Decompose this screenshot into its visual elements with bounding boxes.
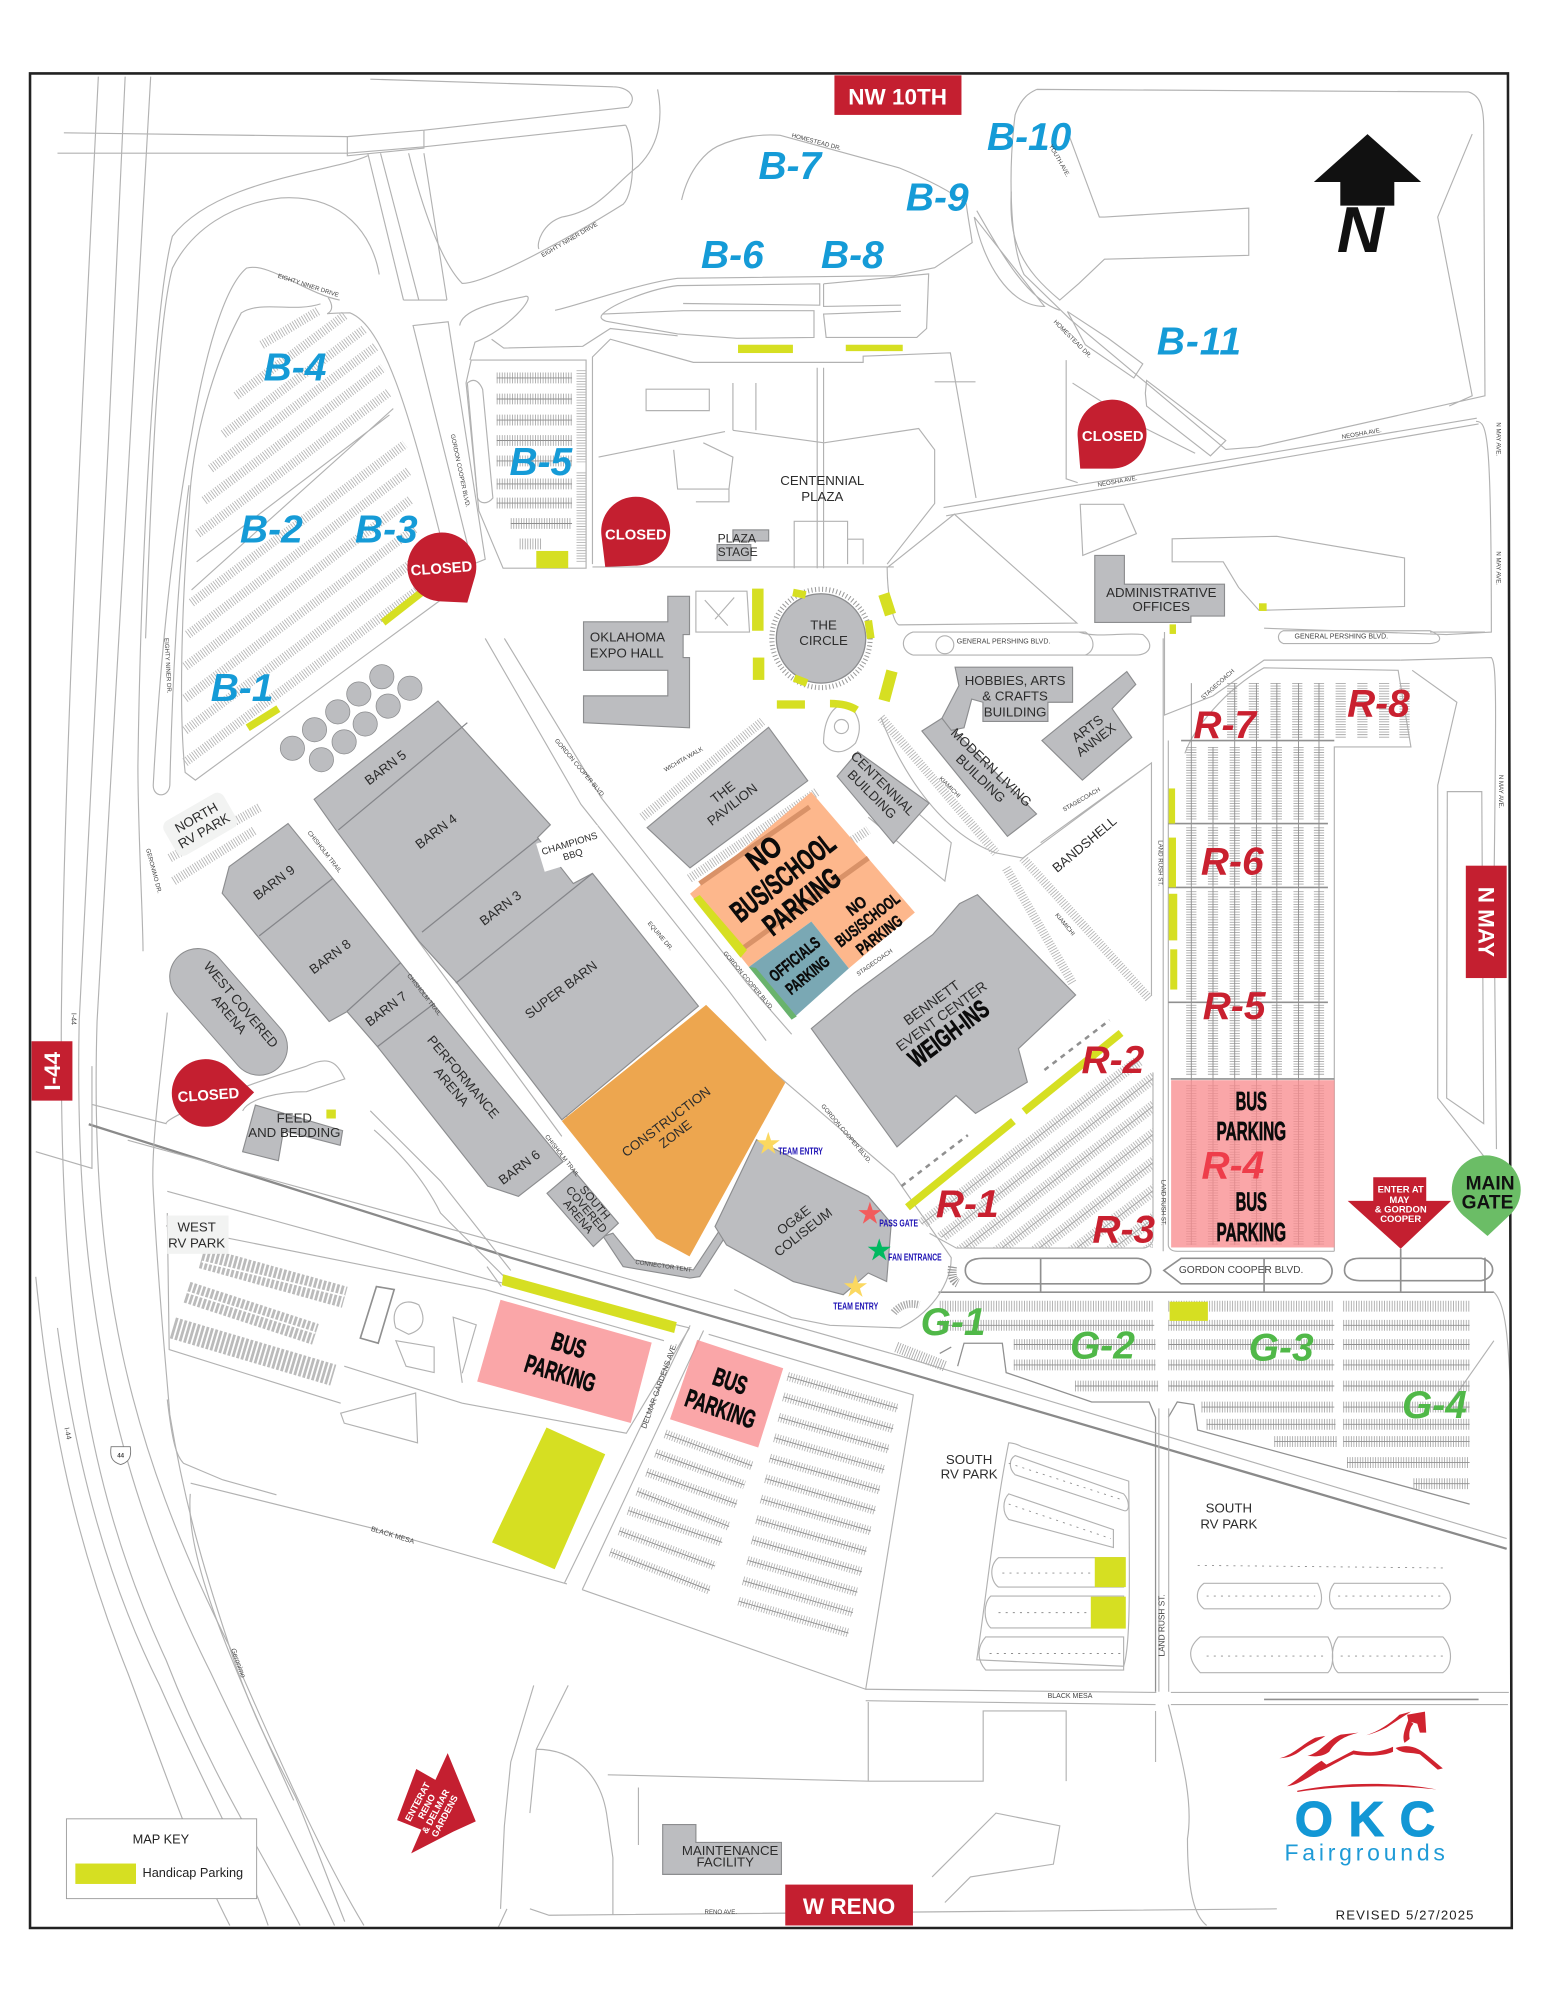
- building and area labels: OFFICES: [1133, 599, 1190, 614]
- building and area labels: & CRAFTS: [982, 688, 1048, 703]
- coliseum entrances: PASS GATE: [879, 1219, 918, 1230]
- building and area labels: PLAZA: [801, 489, 843, 504]
- small road labels: CHISHOLM TRAIL: [306, 830, 343, 875]
- no bus school parking large: NO: [740, 830, 789, 878]
- bus parking center: [681, 1357, 769, 1435]
- enter arrow reno and delmar: [397, 1753, 476, 1853]
- building and area labels: BARN 3: [477, 888, 524, 928]
- centennial building: [837, 752, 929, 843]
- closed pin west arena: CLOSED: [177, 1086, 240, 1106]
- road name: N MAY: N MAY: [1474, 887, 1499, 957]
- red lot labels: R-5: [1203, 985, 1267, 1028]
- building and area labels: ANNEX: [1073, 720, 1119, 760]
- green lot labels: G-2: [1070, 1325, 1135, 1368]
- small road labels: GORDON COOPER BLVD.: [553, 738, 606, 799]
- map key: MAP KEY: [133, 1832, 190, 1847]
- maintenance facility: [663, 1825, 781, 1874]
- south covered arena and connector tent: [547, 1171, 727, 1278]
- building and area labels: ARENA: [560, 1198, 595, 1236]
- pink bus parking areas: [477, 1080, 1335, 1448]
- building and area labels: SOUTH: [946, 1452, 992, 1467]
- building and area labels: BARN 7: [362, 989, 410, 1029]
- small road labels: LAND RUSH ST.: [1157, 840, 1164, 886]
- buildings: [198, 530, 1224, 1874]
- north arrow: [1314, 134, 1421, 266]
- small road labels: I-44: [62, 1427, 72, 1440]
- road name: W RENO: W RENO: [803, 1894, 895, 1919]
- coliseum entrances: TEAM ENTRY: [833, 1301, 878, 1312]
- enter arrow reno and delmar: & DELMAR: [420, 1787, 452, 1835]
- closed pin B-5: [601, 497, 670, 567]
- enter arrow may and gordon cooper: [1348, 1177, 1451, 1249]
- road name: N MAY: [1466, 866, 1507, 978]
- enter arrow may and gordon cooper: ENTER AT: [1378, 1185, 1424, 1196]
- star team entry north: [757, 1132, 780, 1154]
- building and area labels: THE: [810, 617, 837, 632]
- small road labels: NEOSHA AVE.: [1341, 427, 1382, 441]
- small road labels: EIGHTY NINER DRIVE: [277, 273, 340, 299]
- the circle: [772, 589, 870, 688]
- small road labels: GORDON COOPER BLVD.: [449, 434, 471, 508]
- small road labels: GORDON COOPER BLVD.: [721, 950, 775, 1012]
- officials parking: [765, 933, 837, 1001]
- red lot labels: R-7: [1193, 704, 1258, 747]
- blue lot labels: B-6: [701, 234, 764, 277]
- blue lot labels: B-5: [509, 441, 574, 484]
- building and area labels: PAVILION: [704, 780, 760, 829]
- horse: [1279, 1712, 1443, 1792]
- building and area labels: BUILDING: [953, 751, 1008, 806]
- small road labels: Geronimo: [229, 1648, 246, 1679]
- small road labels: HOMESTEAD DR.: [1052, 319, 1093, 360]
- small road labels: EIGHTY NINER DRIVE: [540, 221, 599, 259]
- blue lot labels: B-9: [906, 177, 969, 220]
- parking callouts in black condensed type: [521, 802, 1286, 1435]
- building and area labels: ADMINISTRATIVE: [1106, 585, 1217, 600]
- closed pin B-11: [1078, 400, 1147, 469]
- building and area labels: BARN 4: [412, 811, 460, 852]
- small road labels: NEOSHA AVE.: [1097, 475, 1138, 489]
- parking road medians on Gordon Cooper Blvd: [965, 1258, 1151, 1284]
- coliseum entrances: FAN ENTRANCE: [888, 1252, 942, 1263]
- OG&E coliseum: [715, 1140, 891, 1295]
- road name: W RENO: [785, 1885, 913, 1925]
- bus parking R-4: [1217, 1088, 1286, 1247]
- no bus school parking zone: [690, 792, 915, 1020]
- blue lot labels: B-4: [264, 346, 326, 389]
- enter arrow may and gordon cooper: COOPER: [1380, 1214, 1421, 1225]
- west rv park label: [167, 1216, 229, 1254]
- red lot labels: R-4: [1202, 1145, 1264, 1188]
- small road labels: EIGHTY NINER DR.: [163, 638, 172, 694]
- blue lot labels: [211, 116, 1241, 710]
- building and area labels: BUILDING: [845, 767, 899, 822]
- blue lot labels: B-1: [211, 667, 273, 710]
- building and area labels: BARN 8: [306, 936, 354, 977]
- coliseum entrances: [757, 1132, 942, 1312]
- administrative offices: [1095, 555, 1224, 622]
- no bus school parking large: BUS/SCHOOL: [724, 827, 842, 929]
- enter arrow may and gordon cooper: MAY: [1389, 1195, 1410, 1206]
- small road labels: CHISHOLM TRAIL: [405, 973, 443, 1018]
- small road labels: N MAY AVE.: [1494, 422, 1501, 456]
- building and area labels: ZONE: [656, 1117, 695, 1151]
- okc fairgrounds logo: [1279, 1712, 1445, 1865]
- champions bbq label: BBQ: [562, 847, 584, 863]
- building and area labels: SOUTH: [577, 1184, 612, 1222]
- bus parking west: [521, 1322, 608, 1398]
- red lot labels: R-2: [1081, 1039, 1145, 1082]
- okc fairgrounds logo: Fairgrounds: [1285, 1839, 1445, 1865]
- building and area labels: OG&E: [774, 1202, 814, 1238]
- building and area labels: PLAZA: [718, 532, 757, 546]
- oklahoma expo hall: [584, 596, 690, 728]
- building and area labels: HOBBIES, ARTS: [965, 673, 1066, 688]
- bus parking west: BUS: [548, 1327, 589, 1364]
- building and area labels: STAGE: [718, 545, 758, 559]
- closed pins: [172, 400, 1147, 1127]
- small road labels: STAGECOACH: [1200, 668, 1236, 701]
- green lot labels: G-3: [1249, 1326, 1314, 1369]
- small road labels: YOUTH AVE.: [1047, 143, 1071, 178]
- small road labels: DELMAR GARDENS AVE.: [639, 1342, 679, 1430]
- building and area labels: THE: [708, 778, 738, 807]
- north rv park label: NORTH: [172, 799, 220, 836]
- building and area labels: BANDSHELL: [1049, 813, 1120, 875]
- enter arrow reno and delmar: ENTERAT: [403, 1780, 432, 1823]
- no bus school parking large: [705, 802, 861, 953]
- north arrow: N: [1337, 193, 1386, 266]
- building and area labels: SUPER BARN: [522, 958, 600, 1022]
- blue lot labels: B-11: [1157, 320, 1241, 363]
- small road labels: CHISHOLM TRAIL: [543, 1134, 581, 1179]
- no bus school parking small: NO: [843, 892, 870, 920]
- tanks: [280, 665, 422, 772]
- Bennett event center: [811, 895, 1076, 1147]
- barns 9 8 7 performance arena barn 6: [222, 824, 563, 1196]
- enter arrow reno and delmar: RENO: [416, 1793, 437, 1821]
- small road labels: GORDON COOPER BLVD.: [819, 1103, 873, 1165]
- building and area labels: ARTS: [1069, 712, 1106, 745]
- closed pin B-5: CLOSED: [605, 527, 667, 543]
- west rv park bays: [173, 1258, 345, 1375]
- champions bbq label: [536, 825, 606, 872]
- building and area labels: FACILITY: [697, 1855, 754, 1870]
- officials parking: PARKING: [782, 952, 833, 999]
- small road labels: GORDON COOPER BLVD.: [1179, 1265, 1303, 1276]
- west rv park label: RV PARK: [168, 1235, 225, 1250]
- west covered arena: [198, 977, 259, 1047]
- building and area labels: CIRCLE: [799, 633, 848, 648]
- blue lot labels: B-8: [821, 234, 884, 277]
- north rv park label: RV PARK: [176, 810, 233, 852]
- highway shield 44: [111, 1447, 131, 1465]
- small road labels: N MAY AVE.: [1497, 775, 1504, 809]
- building and area labels: FEED: [277, 1110, 312, 1125]
- small road labels: RENO AVE.: [705, 1909, 737, 1916]
- main gate pin: [1452, 1155, 1521, 1236]
- building and area labels: ARENA: [209, 992, 250, 1037]
- red lot labels: R-8: [1347, 682, 1410, 725]
- building and area labels: BENNETT: [900, 977, 963, 1028]
- star team entry south: [844, 1275, 867, 1297]
- building and area labels: PERFORMANCE: [424, 1033, 502, 1121]
- small road labels: I-44: [70, 1013, 77, 1025]
- small road labels: EQUINE DR.: [646, 920, 674, 952]
- closed pin B-3: [407, 532, 476, 603]
- enter arrow may and gordon cooper: & GORDON: [1375, 1204, 1427, 1215]
- arts annex: [1042, 672, 1136, 780]
- blue lot labels: B-7: [758, 145, 824, 188]
- plaza stage: [717, 530, 769, 561]
- okc fairgrounds logo: OKC: [1295, 1793, 1435, 1847]
- green lot labels: G-1: [921, 1301, 986, 1344]
- green lot labels: G-4: [1402, 1384, 1467, 1427]
- road name: I-44: [32, 1041, 72, 1101]
- small road labels: CONNECTOR TENT: [635, 1259, 692, 1274]
- small road labels: STAGECOACH: [855, 948, 894, 978]
- no bus school parking small: BUS/SCHOOL: [831, 889, 904, 951]
- building and area labels: CENTENNIAL: [848, 748, 918, 818]
- blue lot labels: B-3: [355, 509, 418, 552]
- building and area labels: BARN 6: [496, 1147, 543, 1188]
- building and area labels: ARENA: [431, 1064, 472, 1109]
- road name: I-44: I-44: [40, 1051, 65, 1091]
- barns 5 4 3 and super barn: [314, 701, 698, 1120]
- red lot labels: [936, 682, 1410, 1251]
- bus parking R-4: BUS: [1236, 1088, 1267, 1116]
- bus parking center: PARKING: [681, 1384, 759, 1435]
- map key: [66, 1819, 257, 1899]
- blue lot labels: B-10: [987, 116, 1072, 159]
- red lot labels: R-6: [1201, 841, 1264, 884]
- building and area labels: EXPO HALL: [590, 646, 664, 661]
- small road labels: N MAY AVE.: [1494, 551, 1501, 585]
- west rv park label: WEST: [177, 1219, 216, 1234]
- coliseum entrances: TEAM ENTRY: [778, 1146, 823, 1157]
- building and area labels: BUILDING: [984, 704, 1046, 719]
- building and area labels: COVERED: [563, 1184, 609, 1236]
- main gate pin: MAIN: [1466, 1173, 1515, 1194]
- the pavilion: [647, 727, 808, 868]
- small road labels: WICHITA WALK: [663, 746, 704, 774]
- building and area labels: CONSTRUCTION: [619, 1084, 713, 1160]
- small road labels: GERONIMO DR.: [144, 848, 163, 895]
- small road labels: GENERAL PERSHING BLVD.: [957, 639, 1050, 646]
- building and area labels: [160, 473, 1257, 1870]
- building and area labels: RV PARK: [1200, 1516, 1257, 1531]
- building and area labels: EVENT CENTER: [893, 978, 990, 1054]
- building and area labels: BARN 9: [250, 862, 298, 903]
- bus parking R-4: PARKING: [1217, 1118, 1286, 1146]
- building and area labels: CENTENNIAL: [780, 473, 864, 488]
- star pass gate: [858, 1202, 881, 1224]
- construction zone: [562, 1005, 785, 1256]
- green lot labels: [921, 1301, 1467, 1427]
- red lot labels: R-1: [936, 1183, 999, 1226]
- modern living building: [922, 718, 1037, 836]
- bus parking west: PARKING: [521, 1350, 599, 1398]
- small road labels: KIAMICHI: [937, 775, 962, 800]
- small road labels: STAGECOACH: [1062, 786, 1102, 814]
- small road labels: HOMESTEAD DR.: [791, 132, 842, 152]
- officials parking: OFFICIALS: [765, 933, 824, 986]
- road name: NW 10TH: [834, 75, 961, 115]
- building and area labels: AND BEDDING: [248, 1125, 340, 1140]
- building and area labels: WEST COVERED: [201, 959, 281, 1051]
- map key: Handicap Parking: [143, 1865, 243, 1880]
- building and area labels: MODERN LIVING: [948, 725, 1035, 810]
- building and area labels: MAINTENANCE: [682, 1843, 779, 1858]
- closed pin B-3: CLOSED: [410, 559, 473, 579]
- small road labels: BLACK MESA: [1048, 1693, 1093, 1700]
- hobbies arts building: [942, 667, 1073, 730]
- building and area labels: RV PARK: [941, 1467, 998, 1482]
- north rv park label: [160, 790, 240, 859]
- star fan entrance: [868, 1238, 891, 1260]
- enter arrow reno and delmar: GARDENS: [430, 1794, 460, 1839]
- no bus school parking small: [820, 875, 915, 966]
- blue lot labels: B-2: [240, 509, 303, 552]
- no bus school parking small: PARKING: [852, 911, 906, 959]
- parking rows: [170, 310, 1470, 1633]
- bus parking R-4: BUS: [1236, 1188, 1267, 1216]
- building and area labels: OKLAHOMA: [590, 630, 665, 645]
- handicap parking markers: [248, 345, 1267, 1629]
- building and area labels: BARN 5: [362, 747, 409, 788]
- small road labels: LAND RUSH ST.: [1156, 1594, 1166, 1656]
- red lot labels: R-3: [1092, 1208, 1155, 1251]
- feed and bedding: [243, 1105, 343, 1161]
- road name: NW 10TH: NW 10TH: [848, 85, 947, 110]
- closed pin west arena: [172, 1059, 254, 1127]
- no bus school parking large: PARKING: [757, 861, 847, 942]
- small road labels: KIAMICHI: [1053, 912, 1076, 938]
- bus parking R-4: PARKING: [1217, 1219, 1286, 1247]
- bus parking center: BUS: [709, 1363, 751, 1401]
- weigh-ins: WEIGH-INS: [903, 995, 995, 1073]
- revision date: REVISED 5/27/2025: [1336, 1908, 1473, 1923]
- small road labels: LAND RUSH ST.: [1159, 1180, 1166, 1226]
- highway shield 44: 44: [117, 1452, 125, 1459]
- small road labels: GENERAL PERSHING BLVD.: [1295, 633, 1388, 640]
- closed pin B-11: CLOSED: [1082, 429, 1144, 445]
- building and area labels: COLISEUM: [771, 1205, 835, 1260]
- champions bbq label: CHAMPIONS: [540, 830, 599, 858]
- building and area labels: SOUTH: [1206, 1500, 1252, 1515]
- small road labels: BLACK MESA: [370, 1526, 415, 1546]
- main gate pin: GATE: [1462, 1193, 1514, 1214]
